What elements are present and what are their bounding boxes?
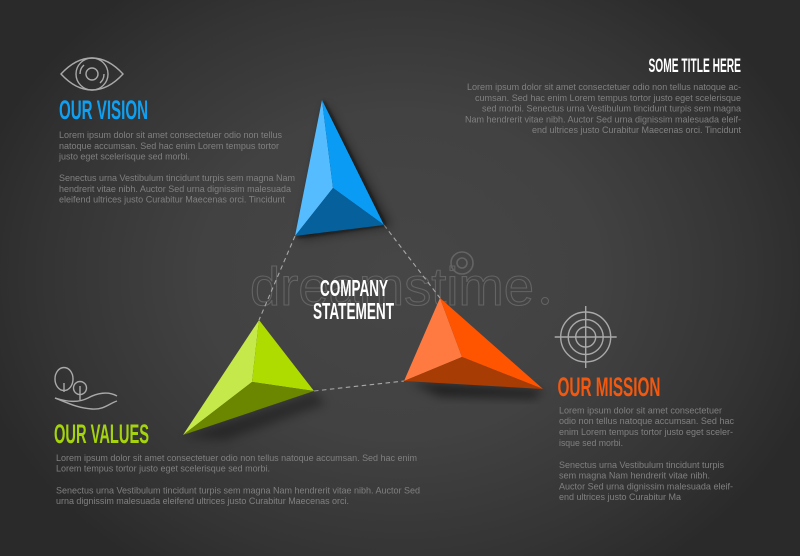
icon: target — [555, 306, 617, 368]
text: mission body: Auctor Sed urna dignissim malesuada eleif- — [559, 480, 733, 492]
icon: trees — [55, 368, 117, 409]
text: vision body: eleifend ultrices justo Curabitur Maecenas orci. Tincidunt — [59, 194, 285, 204]
heading: our vision: OUR VISION — [59, 95, 148, 125]
text: mission body: odio non tellus natoque accumsan. Sed hac — [559, 415, 734, 426]
text: vision body: Lorem ipsum dolor sit amet consectetuer odio non tellus — [59, 129, 282, 140]
watermark: dreamstime — [250, 257, 534, 317]
text: mission body: enim Lorem tempus tortor justo eget sceler- — [559, 426, 733, 437]
text: vision body: hendrerit vitae nibh. Auctor Sed urna dignissim malesuada — [59, 183, 292, 194]
green pyramid — [183, 320, 326, 440]
text: vision body: Senectus urna Vestibulum tincidunt turpis sem magna Nam — [59, 172, 295, 183]
text: values body: Lorem ipsum dolor sit amet consectetuer odio non tellus natoque accumsan. Sed hac enim — [56, 452, 417, 463]
icon: eye — [61, 58, 123, 90]
text: vision body — [58, 129, 295, 204]
company statement — [313, 275, 394, 324]
text: mission body: Senectus urna Vestibulum tincidunt turpis — [559, 459, 724, 470]
text: values body: Senectus urna Vestibulum tincidunt turpis sem magna Nam hendrerit vitae nibh. Auctor Sed — [56, 484, 420, 496]
company statement: COMPANY — [320, 275, 388, 301]
text: top right body: Lorem ipsum dolor sit amet consectetuer odio non tellus natoque ac- — [467, 81, 741, 92]
text: mission body — [559, 404, 734, 502]
text: values body — [56, 452, 420, 506]
text: top right body: Nam hendrerit vitae nibh. Auctor Sed urna dignissim malesuada eleif- — [465, 114, 741, 124]
text: top right body: cumsan. Sed hac enim Lorem tempus tortor justo eget scelerisque — [475, 92, 741, 103]
text: mission body: isque sed morbi. — [559, 437, 623, 448]
blue pyramid — [295, 100, 392, 240]
panel: our vision — [58, 95, 295, 204]
text: values body: urna dignissim malesuada eleifend ultrices justo Curabitur Maecenas orci. — [56, 495, 349, 506]
panel: our values — [54, 419, 420, 506]
company statement: STATEMENT — [313, 298, 394, 324]
text: values body: Lorem tempus tortor justo eget scelerisque sed morbi. — [56, 462, 270, 474]
text: mission body: Lorem ipsum dolor sit amet consectetuer — [559, 404, 722, 416]
heading: our mission: OUR MISSION — [558, 372, 660, 402]
text: vision body: justo eget scelerisque sed morbi. — [58, 150, 190, 162]
text: top right body — [465, 81, 742, 135]
orange pyramid — [404, 298, 543, 398]
text: mission body: end ultrices justo Curabitur Ma — [559, 491, 682, 502]
panel: some title here — [465, 56, 742, 135]
text: top right body: sed morbi. Senectus urna Vestibulum tincidunt turpis sem magna — [482, 102, 742, 114]
panel: our mission — [558, 372, 734, 502]
text: mission body: sem magna Nam hendrerit vitae nibh. — [559, 470, 710, 480]
text: vision body: natoque accumsan. Sed hac enim Lorem tempus tortor — [59, 140, 279, 151]
heading: our values: OUR VALUES — [54, 419, 149, 449]
connector lines — [259, 225, 440, 391]
text: top right body: end ultrices justo Curabitur Maecenas orci. Tincidunt — [532, 124, 741, 135]
